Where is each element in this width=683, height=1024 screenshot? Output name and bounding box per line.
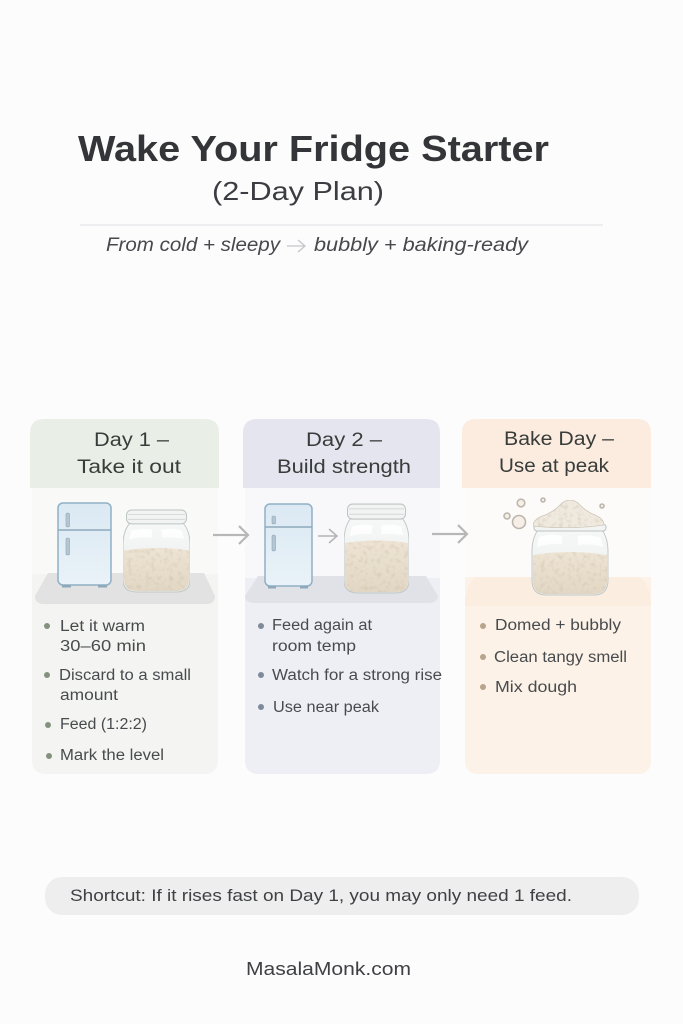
- callout: shortcut: Shortcut: If it rises fast on Day 1, you may only need 1 feed.: [70, 886, 572, 905]
- bake day header: Bake Day –: [504, 429, 614, 450]
- day 1 steps: [44, 618, 191, 764]
- panel: day 2: [243, 419, 442, 774]
- day 1 steps: Discard to a small: [59, 667, 191, 684]
- day 1 header: Day 1 –: [94, 430, 169, 451]
- day 1 steps: Let it warm: [60, 618, 145, 635]
- icon: fridge: [265, 504, 312, 588]
- day 2 header: Build strength: [277, 457, 411, 478]
- counter mat: [35, 573, 215, 604]
- day 1 steps: Mark the level: [60, 747, 164, 764]
- tagline: bubbly + baking-ready: [314, 235, 530, 256]
- panel: day 1: [30, 419, 219, 774]
- day 2 header: [243, 419, 440, 488]
- bake day steps: [480, 617, 627, 696]
- day 2 steps: Feed again at: [272, 617, 373, 634]
- tagline: From cold + sleepy: [106, 235, 282, 256]
- day 1 steps: Feed (1:2:2): [60, 716, 147, 733]
- bake day steps: Domed + bubbly: [495, 617, 621, 634]
- arrow: day 1 to day 2: [213, 526, 248, 544]
- footer credit: MasalaMonk.com: [246, 959, 411, 979]
- icon: fridge: [58, 503, 111, 588]
- callout: shortcut: [45, 877, 639, 915]
- tagline: [106, 235, 530, 256]
- day 2 steps: Watch for a strong rise: [272, 667, 442, 684]
- bake day header: [462, 419, 651, 488]
- day 1 steps: 30–60 min: [60, 638, 146, 655]
- bake day steps: Mix dough: [495, 679, 577, 696]
- panel: bake day: [462, 419, 651, 774]
- day 2 steps: Use near peak: [273, 699, 379, 716]
- bake day steps: Clean tangy smell: [494, 649, 627, 666]
- counter mat: [245, 576, 438, 603]
- icon: jar of starter: [344, 504, 409, 593]
- day 2 steps: [258, 617, 442, 716]
- day 2 header: Day 2 –: [306, 430, 382, 451]
- day 1 header: [30, 419, 219, 488]
- counter platform: [465, 577, 651, 606]
- arrow: day 2 to bake day: [432, 525, 467, 543]
- day 1 header: Take it out: [77, 457, 182, 478]
- icon: jar of starter: [123, 510, 190, 592]
- icon: jar with domed starter: [532, 500, 608, 595]
- day 2 steps: room temp: [272, 638, 356, 655]
- subtitle: (2-Day Plan): [212, 176, 384, 206]
- bake day header: Use at peak: [499, 456, 610, 477]
- title: Wake Your Fridge Starter: [78, 128, 549, 169]
- icon: bubbles: [504, 498, 604, 528]
- day 1 steps: amount: [60, 687, 119, 704]
- arrow: fridge to jar: [318, 529, 337, 543]
